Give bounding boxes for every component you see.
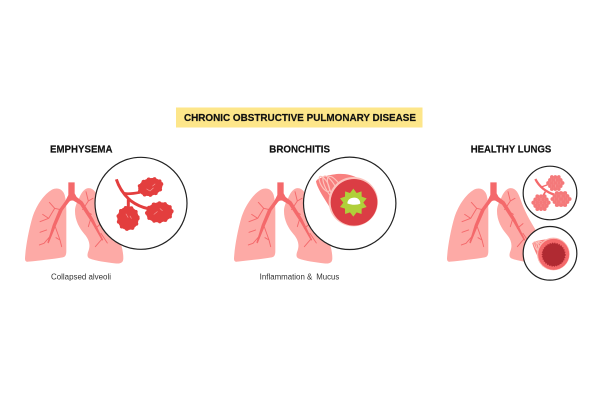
label: inflammation and mucus [260, 272, 339, 282]
heading: emphysema: EMPHYSEMA [50, 144, 113, 156]
magnified circle: healthy airway [523, 226, 577, 280]
airway tube [316, 174, 378, 226]
panel: bronchitis [234, 144, 396, 282]
heading: bronchitis: BRONCHITIS [269, 144, 330, 156]
magnified circle: inflamed airway [304, 157, 396, 250]
label: collapsed alveoli: Collapsed alveoli [51, 272, 111, 282]
lungs illustration: healthy [447, 182, 545, 264]
magnified circle: healthy alveoli [523, 166, 577, 220]
title banner: CHRONIC OBSTRUCTIVE PULMONARY DISEASE [184, 112, 416, 124]
panel: healthy lungs [447, 144, 577, 280]
inflammation and mucus [340, 189, 367, 217]
label: inflammation and mucus: Mucus [316, 272, 339, 282]
magnified circle: collapsed alveoli [95, 157, 187, 249]
lungs illustration: emphysema [25, 182, 123, 264]
panel: emphysema [25, 144, 187, 282]
lungs illustration: bronchitis [234, 182, 332, 264]
label: inflammation and mucus: Inflammation & [260, 272, 313, 282]
heading: healthy lungs: HEALTHY LUNGS [471, 144, 551, 156]
title banner [176, 108, 422, 128]
